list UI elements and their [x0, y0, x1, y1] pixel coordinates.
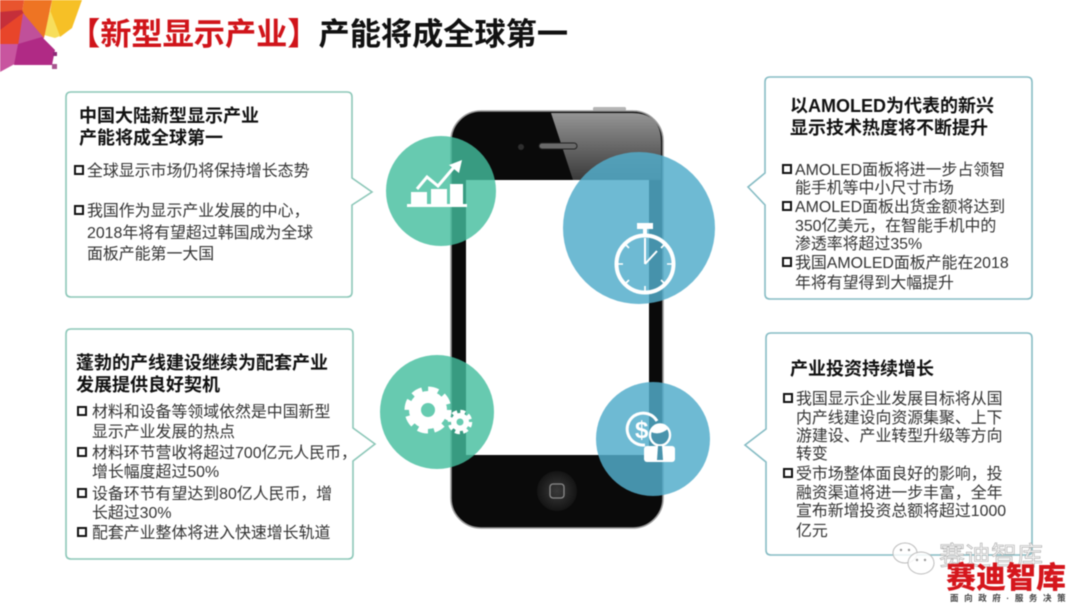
bullets: bottom right panel — [784, 394, 792, 477]
circle icon: investor — [596, 382, 710, 496]
body text: bottom right panel: 转变 — [796, 445, 828, 463]
body text: bottom left panel: 长超过30% — [92, 504, 171, 522]
body text: bottom left panel: 显示产业发展的热点 — [92, 423, 235, 441]
brand logo: red name and slogan: 赛迪智库 — [946, 561, 1066, 595]
body text: bottom left panel: 材料环节营收将超过700亿元人民币， — [92, 444, 357, 462]
body text: bottom right panel: 我国显示企业发展目标将从国 — [796, 390, 1003, 408]
body text: bottom left panel: 增长幅度超过50% — [92, 463, 219, 481]
body text: top right panel: 渗透率将超过35% — [795, 235, 922, 253]
brand logo: red name and slogan: 面向政府·服务决策 — [950, 593, 1071, 603]
circle icon: stopwatch — [563, 152, 715, 304]
body text: bottom right panel: 内产线建设向资源集聚、上下 — [796, 409, 1003, 427]
body text: top right panel: 能手机等中小尺寸市场 — [795, 179, 954, 197]
circle icon: growth chart — [386, 136, 496, 246]
heading: top left panel: 产能将成全球第一 — [79, 127, 223, 148]
body text: top right panel: AMOLED面板将进一步占领智 — [795, 161, 1005, 179]
heading: top right panel: 显示技术热度将不断提升 — [790, 117, 988, 138]
circle icon: gears — [380, 355, 494, 469]
heading: top left panel: 中国大陆新型显示产业 — [79, 105, 259, 126]
bullets: top right panel — [783, 165, 791, 266]
bullets: bottom left panel — [78, 407, 86, 536]
body text: bottom left panel: 材料和设备等领域依然是中国新型 — [92, 403, 330, 421]
bullets: top left panel — [75, 166, 83, 214]
panel: bottom left, production lines — [66, 329, 375, 559]
body text: top left panel: 面板产能第一大国 — [87, 245, 214, 263]
body text: bottom right panel: 宣布新增投资总额将超过1000 — [796, 502, 1006, 520]
logo: polygon decoration — [0, 0, 82, 72]
body text: top left panel: 2018年将有望超过韩国成为全球 — [87, 224, 313, 242]
title: 【新型显示产业】产能将成全球第一 — [69, 17, 568, 52]
heading: top right panel: 以AMOLED为代表的新兴 — [790, 95, 994, 116]
heading: bottom right panel: 产业投资持续增长 — [790, 359, 934, 379]
body text: top right panel: 年将有望得到大幅提升 — [795, 274, 954, 292]
phone illustration — [451, 107, 663, 528]
panel: bottom right, investment — [745, 333, 1032, 555]
body text: bottom right panel: 亿元 — [796, 522, 828, 540]
watermark: WeChat bubbles and name: 赛迪智库 — [939, 541, 1043, 571]
body text: bottom right panel: 融资渠道将进一步丰富，全年 — [796, 484, 1003, 502]
body text: bottom right panel: 游建设、产业转型升级等方向 — [796, 427, 1003, 445]
heading: bottom left panel: 蓬勃的产线建设继续为配套产业 — [76, 352, 328, 373]
body text: top right panel: 我国AMOLED面板产能在2018 — [795, 254, 1009, 272]
body text: bottom right panel: 受市场整体面良好的影响，投 — [796, 465, 1003, 483]
body text: top left panel: 我国作为显示产业发展的中心， — [87, 202, 309, 220]
body text: bottom left panel: 配套产业整体将进入快速增长轨道 — [92, 524, 330, 542]
heading: bottom left panel: 发展提供良好契机 — [76, 374, 220, 395]
panel: top right, AMOLED — [748, 77, 1032, 299]
body text: bottom left panel: 设备环节有望达到80亿人民币，增 — [92, 485, 332, 503]
panel: top left, mainland capacity — [66, 92, 372, 297]
body text: top right panel: 350亿美元，在智能手机中的 — [795, 217, 996, 235]
body text: top left panel: 全球显示市场仍将保持增长态势 — [87, 162, 310, 180]
watermark: WeChat bubbles and name — [893, 541, 1043, 574]
circle icon: investor: $ — [635, 417, 649, 444]
body text: top right panel: AMOLED面板出货金额将达到 — [795, 198, 1005, 216]
